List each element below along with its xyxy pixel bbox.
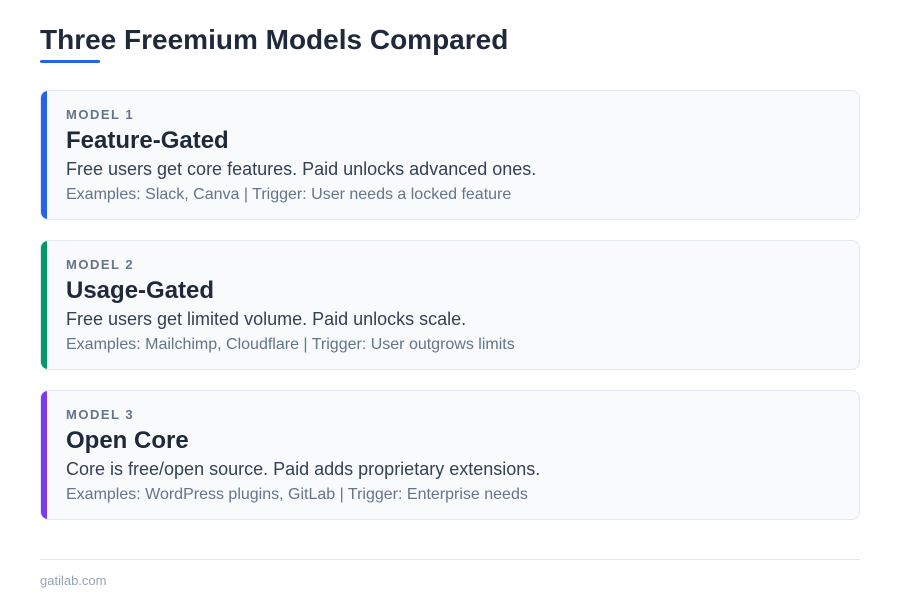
panel: model 2 — [40, 240, 860, 370]
description: Core is free/open source. Paid adds proprietary extensions. — [66, 459, 540, 479]
description: Free users get core features. Paid unlocks advanced ones. — [66, 159, 536, 179]
examples: Examples: WordPress plugins, GitLab | Trigger: Enterprise needs — [66, 486, 528, 503]
examples: Examples: Mailchimp, Cloudflare | Trigger: User outgrows limits — [66, 336, 515, 353]
heading: Feature-Gated — [66, 127, 229, 154]
heading: Open Core — [66, 427, 189, 454]
examples: Examples: Slack, Canva | Trigger: User needs a locked feature — [66, 186, 511, 203]
description: Free users get limited volume. Paid unlocks scale. — [66, 309, 466, 329]
label: MODEL 1 — [66, 107, 134, 122]
label: MODEL 3 — [66, 407, 134, 422]
label: MODEL 2 — [66, 257, 134, 272]
panel: model 3 — [40, 390, 860, 520]
title underline — [40, 60, 100, 63]
title: Three Freemium Models Compared — [40, 24, 508, 55]
panel: model 1 — [40, 90, 860, 220]
heading: Usage-Gated — [66, 277, 214, 304]
footer: gatilab.com — [40, 573, 106, 588]
